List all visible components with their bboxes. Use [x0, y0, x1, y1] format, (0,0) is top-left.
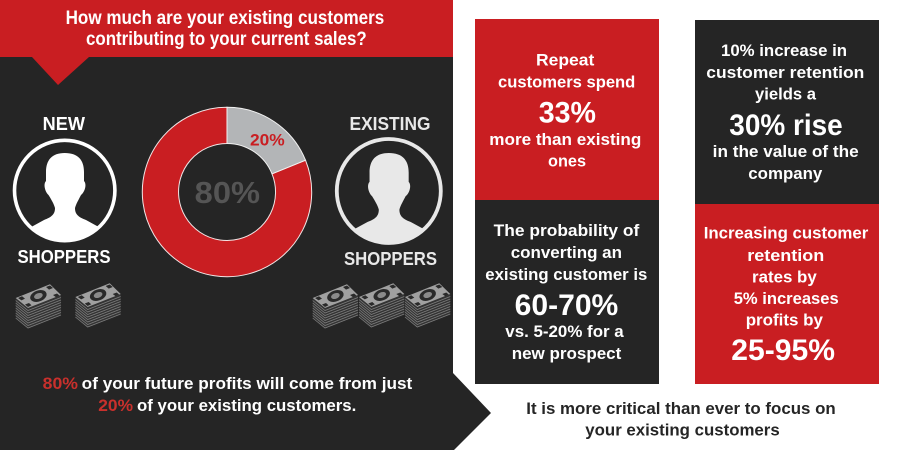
panel: retention profits — [695, 204, 879, 384]
panel: repeat customers: ones — [548, 152, 586, 171]
panel: retention profits: profits by — [746, 310, 824, 329]
panel: conversion probability: new prospect — [512, 344, 622, 363]
panel: repeat customers — [475, 19, 659, 200]
stat: 30% rise: 30% rise — [729, 109, 843, 142]
donut value: 80 percent: 80% — [195, 175, 260, 210]
panel: left dark arrow panel — [0, 0, 491, 450]
panel: repeat customers: more than existing — [489, 130, 641, 149]
panel: retention value: company — [748, 164, 823, 183]
panel: retention profits: 5% increases — [734, 289, 839, 308]
panel: retention profits: retention — [747, 246, 824, 265]
heading: How much are your existing customers — [66, 8, 384, 29]
panel: retention value: yields a — [755, 85, 817, 104]
panel: conversion probability: The probability of — [494, 221, 640, 240]
panel: conversion probability: converting an — [511, 243, 622, 262]
text: profit statement — [43, 374, 413, 415]
panel: retention profits: rates by — [752, 267, 817, 286]
header banner — [0, 0, 453, 85]
donut segment: 80 percent — [142, 107, 312, 277]
text: profit statement: of your existing customers. — [137, 396, 356, 415]
panel: repeat customers: Repeat — [536, 51, 595, 70]
donut value: 20 percent: 20% — [250, 130, 285, 150]
donut segment: 20 percent — [227, 107, 306, 174]
donut chart — [142, 107, 312, 277]
panel: retention value: customer retention — [706, 63, 864, 82]
existing shoppers group — [337, 114, 441, 269]
stat: 25-95%: 25-95% — [731, 334, 835, 367]
panel: retention profits: Increasing customer — [704, 224, 869, 243]
label: new: NEW — [43, 114, 85, 134]
icon: existing shopper avatar — [337, 139, 441, 243]
banner pointer — [0, 0, 453, 85]
panel: repeat customers: customers spend — [498, 73, 635, 92]
text: profit statement: 80% — [43, 374, 78, 393]
heading — [66, 8, 384, 50]
panel: conversion probability — [475, 200, 659, 384]
new shoppers group — [14, 114, 115, 267]
panel: conversion probability: existing customer is — [485, 265, 647, 284]
text: profit statement: 20% — [98, 396, 133, 415]
label: existing: EXISTING — [350, 114, 430, 134]
text: closing statement: It is more critical than ever to focus on — [526, 399, 836, 418]
label: shoppers: SHOPPERS — [18, 247, 110, 267]
heading: contributing to your current sales? — [86, 29, 367, 50]
text: closing statement: your existing customers — [585, 421, 780, 440]
icons: money stacks, existing shoppers — [313, 283, 450, 328]
panel: retention value — [695, 20, 879, 204]
icon: new shopper avatar — [14, 140, 115, 241]
panel: retention value: in the value of the — [713, 142, 859, 161]
stat: 33%: 33% — [539, 97, 596, 130]
stat: 60-70%: 60-70% — [515, 289, 618, 322]
panel: retention value: 10% increase in — [721, 41, 847, 60]
text: closing statement — [526, 399, 836, 440]
text: profit statement: of your future profits will come from just — [82, 374, 413, 393]
icons: money stacks, new shoppers — [16, 283, 121, 328]
panel: conversion probability: vs. 5-20% for a — [505, 322, 624, 341]
label: shoppers: SHOPPERS — [344, 249, 437, 269]
